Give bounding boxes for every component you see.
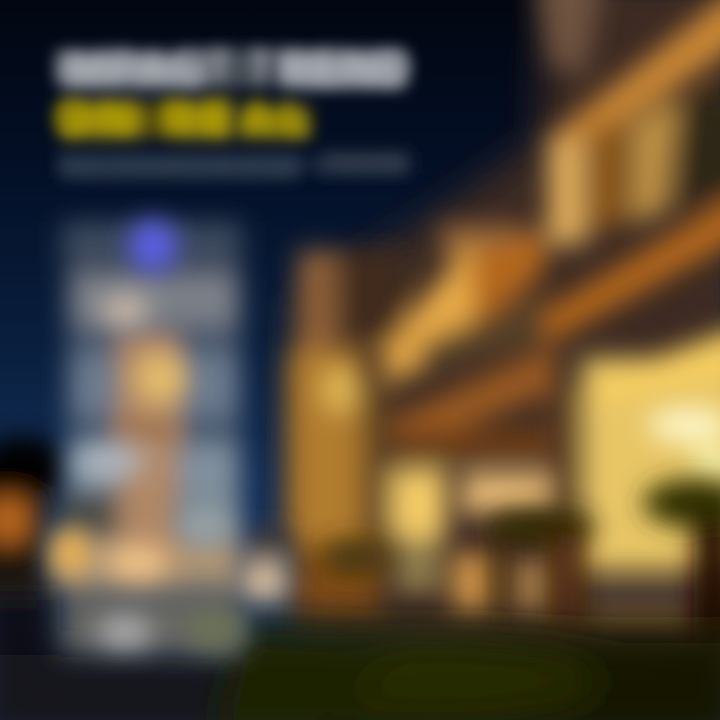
- ground: [0, 585, 720, 720]
- heading backing blocks: [60, 50, 410, 179]
- heading: first line: IMPACT TREND: [55, 41, 411, 93]
- palm trees: [323, 479, 720, 645]
- heading: second line: ON REAL: [55, 91, 318, 143]
- subtitle: Key commercial property trends: [58, 151, 404, 178]
- building gold facade: [288, 0, 720, 630]
- tower highlights: [52, 220, 245, 650]
- right building mass: [290, 0, 720, 680]
- window glow: [648, 407, 720, 482]
- left trees and lights: [0, 436, 288, 602]
- tower of panels: [52, 222, 242, 653]
